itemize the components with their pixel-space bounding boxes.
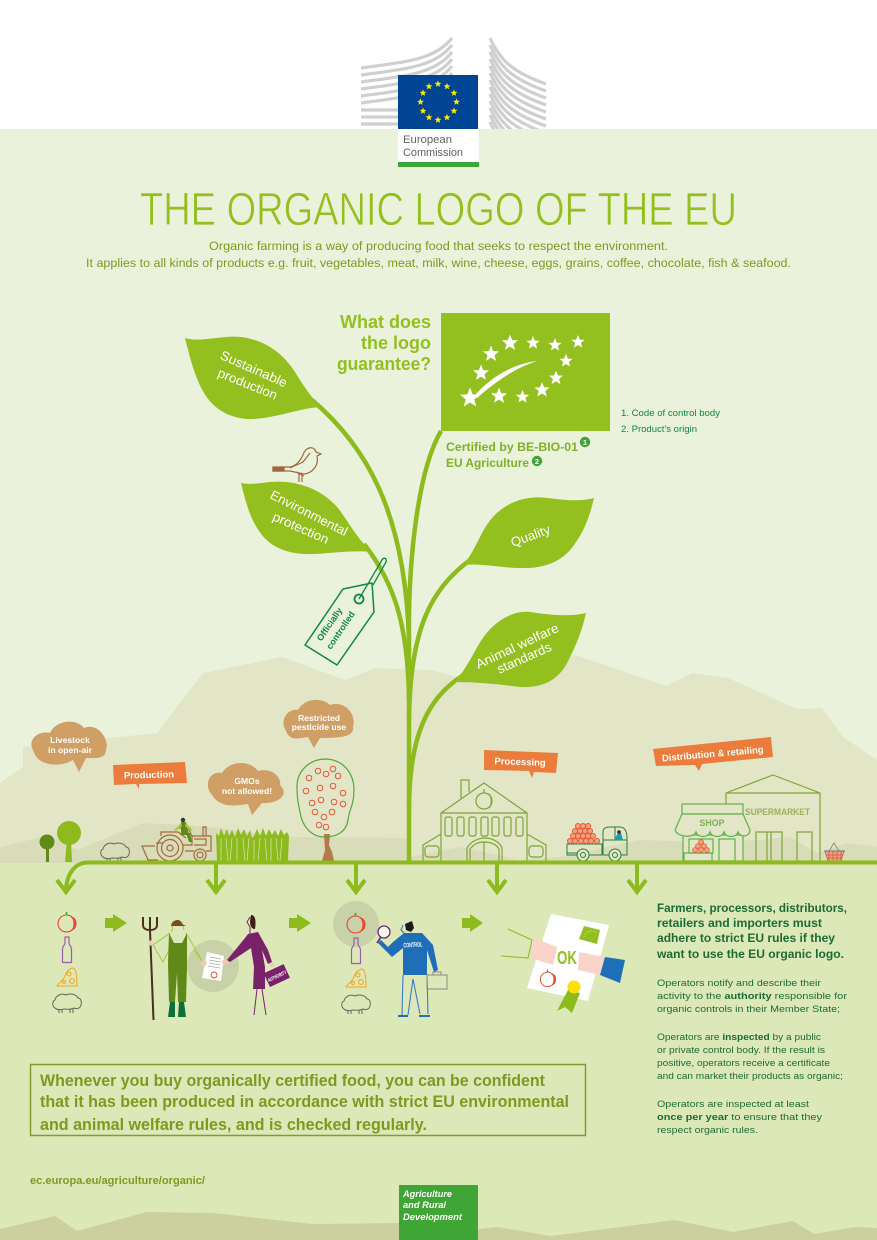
logo annotations: 1 bbox=[583, 438, 587, 447]
stems bbox=[312, 400, 470, 864]
logo annotations: 2 bbox=[535, 457, 539, 466]
mini organic logo bbox=[579, 926, 600, 944]
rule 3: Operators are inspected at least bbox=[657, 1099, 809, 1110]
leaf: animal welfare standards: Animal welfare bbox=[473, 620, 561, 672]
icon: bird bbox=[273, 448, 321, 482]
callout: confidence statement bbox=[30, 1064, 586, 1136]
footnotes: 2. Product's origin bbox=[621, 424, 697, 434]
background hills bbox=[0, 655, 877, 863]
rules heading: Farmers, processors, distributors, bbox=[657, 901, 847, 915]
rule 1: activity to the authority responsible for bbox=[657, 991, 848, 1002]
leaf: animal welfare standards: standards bbox=[495, 639, 554, 677]
footnotes bbox=[621, 408, 720, 434]
step 2: farmer notifying authority bbox=[143, 915, 290, 1020]
intro text: It applies to all kinds of products e.g. fruit, vegetables, meat, milk, wine, cheese, eggs, grains, coffee, chocolate, fish & seafood. bbox=[86, 256, 791, 270]
shop apples bbox=[693, 840, 709, 852]
rule 2: Operators are inspected by a public bbox=[657, 1032, 821, 1043]
rules text block bbox=[656, 901, 848, 1136]
callout: confidence statement: Whenever you buy organically certified food, you can be confident bbox=[40, 1072, 545, 1090]
rule 3 bbox=[657, 1099, 822, 1136]
leaf: environmental protection bbox=[241, 482, 372, 554]
logo annotations: EU Agriculture bbox=[446, 456, 529, 470]
label: distribution and retailing bbox=[653, 737, 773, 771]
icon: maize field bbox=[216, 828, 289, 861]
cloud: GMOs not allowed: GMOs bbox=[234, 776, 260, 786]
farmer bbox=[143, 917, 203, 1020]
rule 1 bbox=[657, 978, 848, 1015]
leaf: animal welfare standards bbox=[454, 612, 586, 687]
rule 2: positive, operators receive a certificate bbox=[657, 1058, 830, 1069]
cloud: livestock in open-air: in open-air bbox=[48, 745, 93, 755]
tag: officially controlled: Officially bbox=[315, 606, 344, 643]
title: THE ORGANIC LOGO OF THE EU bbox=[140, 183, 737, 235]
icon: delivery truck bbox=[567, 823, 627, 861]
leaf: sustainable production: production bbox=[216, 365, 280, 403]
European Commission logo bbox=[361, 38, 546, 168]
intro text bbox=[86, 239, 791, 270]
inspector briefcase bbox=[427, 972, 447, 989]
step 3: inspection bbox=[333, 901, 447, 1016]
left hand bbox=[530, 938, 557, 965]
heading: what does the logo guarantee bbox=[337, 312, 431, 374]
label: processing: Processing bbox=[494, 756, 546, 769]
icon: shopping basket bbox=[824, 843, 845, 861]
rules heading: want to use the EU organic logo. bbox=[656, 947, 844, 961]
label: production bbox=[113, 762, 187, 789]
cloud: restricted pesticide use bbox=[284, 700, 354, 748]
rule 3: respect organic rules. bbox=[657, 1125, 758, 1136]
cloud: restricted pesticide use: pesticide use bbox=[292, 722, 346, 732]
inspector sweater lettering: CONTROL bbox=[403, 942, 423, 949]
rule 2: or private control body. If the result is bbox=[657, 1045, 825, 1056]
callout: confidence statement: that it has been produced in accordance with strict EU environmental bbox=[40, 1093, 569, 1111]
logo annotations bbox=[446, 437, 590, 470]
arrow: step 1 to 2 bbox=[105, 914, 127, 932]
icon: shop bbox=[675, 804, 750, 861]
shop sign: SHOP bbox=[700, 818, 725, 829]
authority woman bbox=[227, 915, 290, 1015]
tag: officially controlled bbox=[305, 558, 386, 665]
callout: confidence statement: and animal welfare rules, and is checked regularly. bbox=[40, 1116, 427, 1134]
arrow: step 3 to 4 bbox=[462, 914, 483, 932]
cloud: livestock in open-air bbox=[31, 722, 107, 772]
cloud: GMOs not allowed bbox=[208, 763, 284, 815]
authority briefcase: AUTHORITY bbox=[267, 970, 288, 984]
footer hills bbox=[0, 1212, 877, 1240]
icon: processing factory bbox=[423, 780, 546, 861]
heading: what does the logo guarantee: What does bbox=[340, 312, 431, 332]
rule 1: Operators notify and describe their bbox=[657, 978, 822, 989]
rules heading: retailers and importers must bbox=[657, 916, 822, 930]
logo wordmark bbox=[403, 134, 463, 159]
rule 2 bbox=[657, 1032, 843, 1082]
icon: apple tree bbox=[297, 759, 354, 861]
EU organic logo bbox=[441, 313, 610, 431]
tag: officially controlled: controlled bbox=[324, 609, 357, 651]
step 1: products bbox=[53, 912, 81, 1013]
DG Agriculture footer block: Development bbox=[403, 1212, 463, 1222]
DG Agriculture footer block bbox=[399, 1185, 478, 1240]
footnotes: 1. Code of control body bbox=[621, 408, 720, 418]
leaf: sustainable production: Sustainable bbox=[218, 347, 290, 390]
plant bbox=[185, 337, 594, 864]
heading: what does the logo guarantee: guarantee? bbox=[337, 354, 431, 374]
supermarket sign: SUPERMARKET bbox=[745, 807, 810, 818]
step 4: organic certificate bbox=[501, 914, 625, 1013]
leaf: environmental protection: Environmental bbox=[268, 487, 350, 539]
tree apples bbox=[303, 766, 346, 830]
leaf: environmental protection: protection bbox=[270, 509, 331, 547]
icon: supermarket bbox=[726, 775, 820, 861]
ground line with arrows bbox=[57, 862, 877, 892]
cloud: restricted pesticide use: Restricted bbox=[298, 713, 340, 723]
OK text: OK bbox=[557, 947, 577, 968]
Berlaymont building stripes bbox=[360, 37, 546, 129]
cloud: livestock in open-air: Livestock bbox=[50, 735, 90, 745]
rule 1: organic controls in their Member State; bbox=[657, 1004, 840, 1015]
DG Agriculture footer block: Agriculture bbox=[402, 1189, 452, 1199]
leaf: quality bbox=[463, 497, 594, 568]
heading: what does the logo guarantee: the logo bbox=[361, 333, 431, 353]
rule 3: once per year to ensure that they bbox=[657, 1112, 822, 1123]
logo wordmark: European bbox=[403, 134, 452, 146]
certificate document bbox=[201, 952, 228, 981]
leaf label: quality: Quality bbox=[509, 522, 553, 550]
icon: tractor with farmer bbox=[142, 818, 211, 861]
intro text: Organic farming is a way of producing food that seeks to respect the environment. bbox=[209, 239, 668, 253]
rosette bbox=[557, 990, 580, 1013]
leaf: sustainable production bbox=[185, 337, 321, 419]
DG Agriculture footer block: and Rural bbox=[403, 1200, 446, 1210]
rules heading: adhere to strict EU rules if they bbox=[657, 931, 835, 945]
website link: ec.europa.eu/agriculture/organic/ bbox=[30, 1175, 205, 1187]
icon: grazing sheep bbox=[101, 843, 129, 862]
label: production: Production bbox=[124, 769, 174, 782]
logo annotations: Certified by BE-BIO-01 bbox=[446, 440, 578, 454]
truck cargo apples bbox=[567, 823, 600, 844]
label: processing bbox=[484, 750, 558, 778]
right hand and sleeve bbox=[578, 952, 605, 975]
icon: trees bbox=[40, 821, 81, 862]
logo wordmark: Commission bbox=[403, 147, 463, 159]
rules heading bbox=[656, 901, 847, 961]
label: distribution and retailing: Distribution & retailing bbox=[661, 745, 764, 764]
EU flag bbox=[398, 75, 478, 129]
tractor driver bbox=[174, 818, 193, 842]
cloud: GMOs not allowed: not allowed! bbox=[222, 786, 272, 796]
arrow: step 2 to 3 bbox=[289, 914, 311, 932]
rule 2: and can market their products as organic; bbox=[657, 1071, 843, 1082]
